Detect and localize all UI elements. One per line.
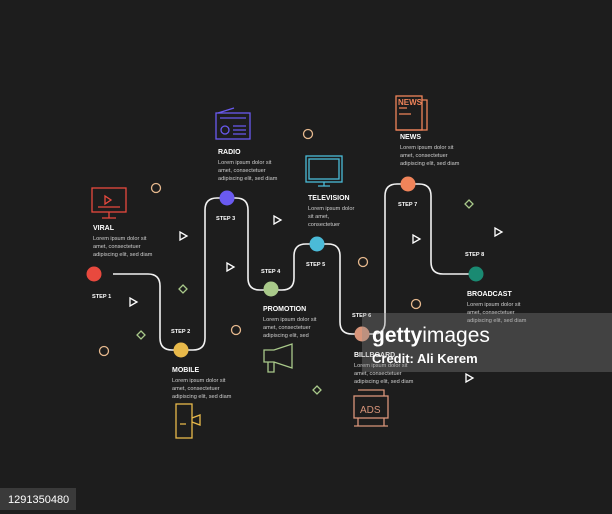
text blocks: Lorem ipsum dolor sit [93,236,147,242]
text blocks: amet, consectetuer [218,168,266,174]
text blocks: Lorem ipsum dolor sit [218,160,272,166]
text blocks: amet, consectetuer [93,244,141,250]
step labels [92,202,484,335]
text blocks: adipiscing elit, sed diam [172,394,232,400]
decorations [100,130,502,394]
text blocks: amet, consectetuer [467,310,515,316]
step dots [86,176,484,358]
text blocks: amet, consectetuer [263,325,311,331]
step labels: STEP 5 [306,262,325,268]
watermark band: Credit: Ali Kerem [372,351,478,366]
step labels: STEP 4 [261,269,281,275]
text blocks: VIRAL [93,225,115,232]
text blocks: sit amet, [308,214,330,220]
text blocks: PROMOTION [263,306,306,313]
text blocks [93,134,527,400]
step labels: STEP 7 [398,202,417,208]
text blocks: amet, consectetuer [354,371,402,377]
icons: NEWS [398,98,423,107]
text blocks: adipiscing elit, sed [263,333,309,339]
text blocks: RADIO [218,149,241,156]
text blocks: MOBILE [172,367,200,374]
image id label [0,488,76,510]
text blocks: Lorem ipsum dolor sit [467,302,521,308]
text blocks: Lorem ipsum dolor sit [263,317,317,323]
text blocks: TELEVISION [308,195,350,202]
text blocks: BROADCAST [467,291,512,298]
text blocks: NEWS [400,134,421,141]
watermark band: gettyimages [372,324,490,347]
timeline path [113,184,476,350]
text blocks: adipiscing elit, sed diam [93,252,153,258]
text blocks: amet, consectetuer [172,386,220,392]
step labels: STEP 3 [216,216,235,222]
text blocks: adipiscing elit, sed diam [467,318,527,324]
text blocks: Lorem ipsum dolor sit [400,145,454,151]
text blocks: Lorem ipsum dolor sit [172,378,226,384]
step labels: STEP 1 [92,294,111,300]
text blocks: amet, consectetuer [400,153,448,159]
image id label: 1291350480 [8,494,69,506]
text blocks: Lorem ipsum dolor sit [354,363,408,369]
text blocks: consectetuer [308,222,340,228]
icons: ADS [360,405,381,416]
text blocks: adipiscing elit, sed diam [400,161,460,167]
text blocks: adipiscing elit, sed diam [218,176,278,182]
text blocks: BILLBOARD [354,352,395,359]
step labels: STEP 8 [465,252,484,258]
text blocks: Lorem ipsum dolor [308,206,354,212]
watermark band [362,313,612,372]
step labels: STEP 2 [171,329,190,335]
icons [92,96,427,438]
step labels: STEP 6 [352,313,371,319]
text blocks: adipiscing elit, sed diam [354,379,414,385]
